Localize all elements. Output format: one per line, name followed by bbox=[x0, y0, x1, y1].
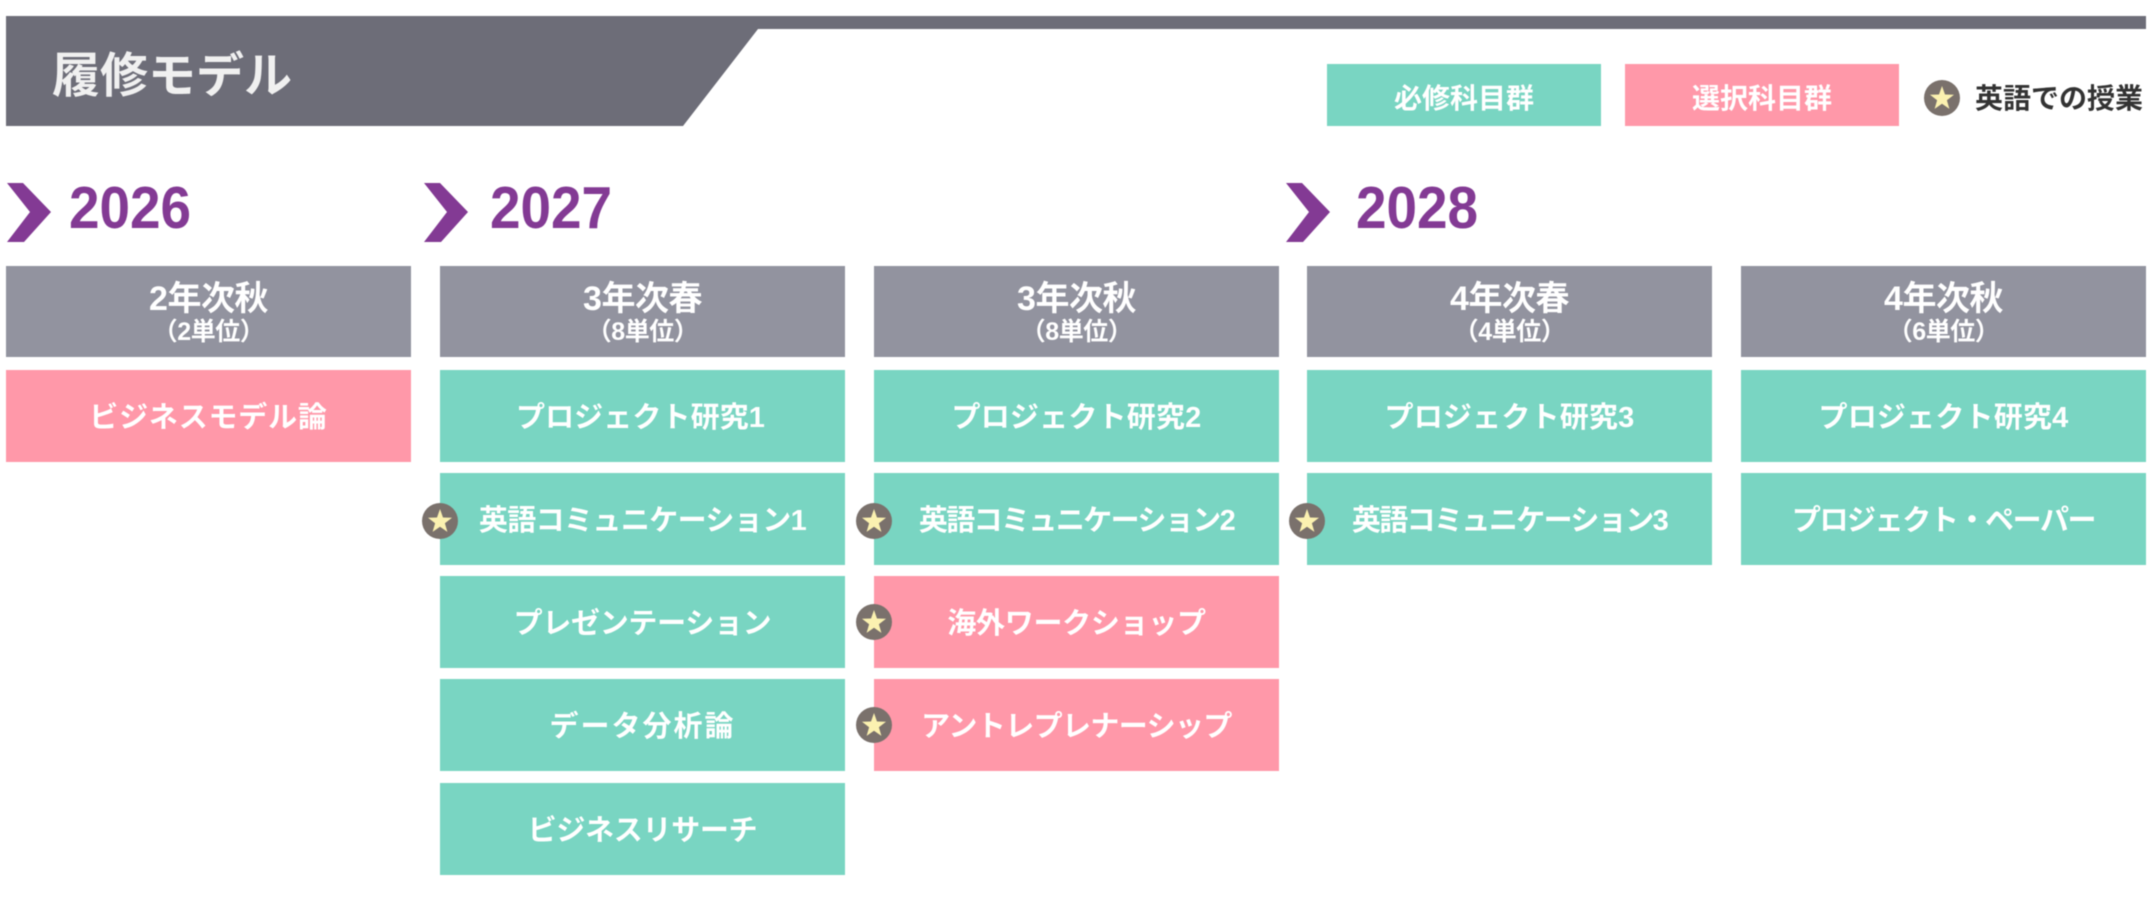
year 2026: 2026 bbox=[69, 175, 191, 241]
course: データ分析論 bbox=[440, 679, 845, 770]
course: プロジェクト研究2: プロジェクト研究2 bbox=[952, 402, 1201, 434]
column header: 2年次秋: （2単位） bbox=[153, 318, 264, 346]
course: ビジネスリサーチ bbox=[440, 783, 845, 874]
course: 英語コミュニケーション1 bbox=[440, 473, 845, 564]
icon: star 英語コミュニケーション2 bbox=[855, 502, 892, 540]
icon: star 英語コミュニケーション1 bbox=[421, 502, 458, 540]
column header: 4年次春: （4単位） bbox=[1454, 318, 1565, 346]
course: プレゼンテーション bbox=[440, 576, 845, 668]
course: プロジェクト研究4 bbox=[1741, 370, 2146, 462]
course: プロジェクト・ペーパー bbox=[1741, 473, 2146, 564]
column header: 4年次春: 4年次春 bbox=[1450, 280, 1569, 318]
course: 英語コミュニケーション2 bbox=[874, 473, 1279, 564]
column header: 3年次秋: 3年次秋 bbox=[1017, 280, 1136, 318]
title: 履修モデル bbox=[52, 50, 292, 103]
icon: star アントレプレナーシップ bbox=[855, 706, 893, 744]
icon: star 英語コミュニケーション3 bbox=[1288, 502, 1326, 540]
icon: star 海外ワークショップ bbox=[855, 603, 893, 641]
icon: legend star bbox=[1923, 79, 1961, 117]
course: プレゼンテーション: プレゼンテーション bbox=[514, 608, 771, 640]
course: ビジネスモデル論: ビジネスモデル論 bbox=[89, 402, 328, 434]
course: 海外ワークショップ: 海外ワークショップ bbox=[947, 608, 1206, 640]
year 2027: 2027 bbox=[490, 175, 612, 241]
legend: elective courses bbox=[1625, 64, 1899, 126]
year 2028: 2028 bbox=[1356, 175, 1478, 241]
course: アントレプレナーシップ bbox=[874, 679, 1279, 770]
course: 英語コミュニケーション3 bbox=[1307, 473, 1712, 564]
column header: 2年次秋 bbox=[6, 266, 411, 357]
column header: 3年次秋: （8単位） bbox=[1021, 318, 1132, 346]
course: ビジネスリサーチ: ビジネスリサーチ bbox=[528, 815, 757, 847]
column header: 4年次秋 bbox=[1741, 266, 2146, 357]
course: 英語コミュニケーション1: 英語コミュニケーション1 bbox=[479, 505, 806, 537]
legend: elective courses: 選択科目群 bbox=[1692, 82, 1832, 114]
icon: chevron 2028 bbox=[1286, 182, 1330, 243]
legend: English-taught label: 英語での授業 bbox=[1975, 83, 2143, 114]
course: アントレプレナーシップ: アントレプレナーシップ bbox=[921, 711, 1232, 743]
column header: 3年次秋 bbox=[874, 266, 1279, 357]
course: データ分析論: データ分析論 bbox=[549, 711, 736, 743]
course: 英語コミュニケーション3: 英語コミュニケーション3 bbox=[1352, 505, 1667, 537]
icon: chevron 2027 bbox=[424, 182, 468, 243]
column header: 2年次秋: 2年次秋 bbox=[149, 280, 268, 318]
column header: 4年次春 bbox=[1307, 266, 1712, 357]
column header: 4年次秋: 4年次秋 bbox=[1884, 280, 2003, 318]
course: プロジェクト研究3: プロジェクト研究3 bbox=[1385, 402, 1634, 434]
course: 英語コミュニケーション2: 英語コミュニケーション2 bbox=[919, 505, 1234, 537]
course: ビジネスモデル論 bbox=[6, 370, 411, 462]
legend: required courses bbox=[1327, 64, 1601, 126]
course: プロジェクト研究2 bbox=[874, 370, 1279, 462]
title banner bbox=[5, 15, 2147, 127]
course: プロジェクト研究4: プロジェクト研究4 bbox=[1819, 402, 2068, 434]
course: プロジェクト研究1: プロジェクト研究1 bbox=[516, 402, 765, 434]
course: プロジェクト研究1 bbox=[440, 370, 845, 462]
column header: 3年次春: 3年次春 bbox=[583, 280, 702, 318]
icon: chevron 2026 bbox=[6, 182, 52, 243]
column header: 3年次春 bbox=[440, 266, 845, 357]
column header: 4年次秋: （6単位） bbox=[1888, 318, 1999, 346]
column header: 3年次春: （8単位） bbox=[587, 318, 698, 346]
course: プロジェクト研究3 bbox=[1307, 370, 1712, 462]
legend: required courses: 必修科目群 bbox=[1394, 82, 1534, 114]
course: 海外ワークショップ bbox=[874, 576, 1279, 668]
course: プロジェクト・ペーパー: プロジェクト・ペーパー bbox=[1792, 505, 2095, 537]
